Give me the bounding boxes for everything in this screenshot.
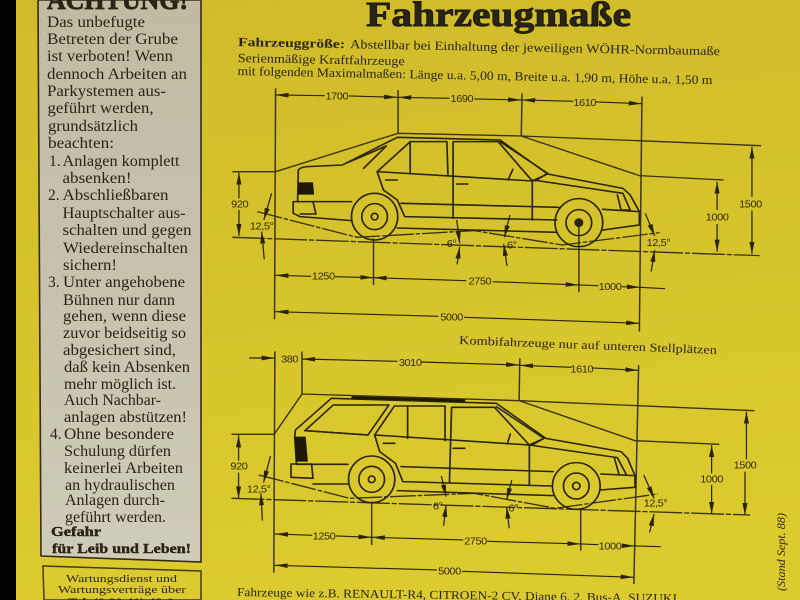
- estate roof rail: [352, 397, 465, 401]
- warning text block: zuvor beidseitig so: [63, 325, 186, 342]
- warning text block: abgesichert sind,: [63, 342, 176, 359]
- estate dimension labels: [230, 354, 757, 577]
- warning text block: Betreten der Grube: [47, 31, 178, 48]
- estate dimension labels: 1000: [599, 541, 622, 552]
- estate dimension labels: 1000: [700, 474, 724, 485]
- sedan dimension labels: 6°: [507, 240, 517, 251]
- warning text block: absenken!: [62, 170, 132, 187]
- estate dimension labels: 2750: [464, 536, 487, 547]
- sedan dimension labels: 12,5°: [647, 237, 670, 249]
- sedan dimension labels: 1690: [451, 93, 474, 105]
- diagram: estate dimensions: [230, 352, 757, 584]
- sedan dimension labels: 2750: [469, 276, 492, 287]
- estate tail light: [295, 437, 308, 462]
- warning text block: [47, 14, 192, 526]
- vehicle size description: Serienmäßige Kraftfahrzeuge: [238, 51, 405, 68]
- sedan car outline: [293, 137, 639, 247]
- sedan dimension labels: 1610: [573, 97, 597, 109]
- warning text block: Anlagen durch-: [65, 492, 165, 509]
- estate dimension labels: 6°: [508, 503, 518, 514]
- vehicle size description: mit folgenden Maximalmaßen: Länge u.a. 5,00 m, Breite u.a. 1,90 m, Höhe u.a. 1,50 m: [237, 64, 713, 87]
- estate dimension labels: 380: [281, 354, 299, 366]
- warning text block: 1.: [49, 153, 61, 170]
- sedan dimension labels: 920: [231, 199, 249, 210]
- estate dimension labels: 1610: [570, 364, 594, 375]
- warning text block: daß kein Absenken: [64, 359, 190, 376]
- estate vehicles note: Kombifahrzeuge nur auf unteren Stellplätzen: [459, 333, 717, 357]
- warning text block: an hydraulischen: [65, 477, 175, 494]
- warning text block: Schulung dürfen: [64, 443, 171, 460]
- warning text block: 3.: [48, 274, 60, 291]
- sedan dimension labels: 1250: [312, 271, 335, 282]
- warning text block: keinerlei Arbeiten: [64, 460, 183, 477]
- estate dimension labels: 1500: [734, 460, 757, 472]
- warning text block: Bühnen nur dann: [63, 292, 175, 309]
- warning text block: Das unbefugte: [47, 14, 145, 31]
- warning text block: ist verboten! Wenn: [47, 48, 173, 65]
- estate dimension labels: 3010: [399, 357, 422, 369]
- warning text block: 2.: [48, 187, 60, 204]
- danger notice: [51, 524, 191, 556]
- warning text block: Unter angehobene: [63, 274, 185, 291]
- estate dimension labels: 6°: [433, 501, 443, 512]
- vehicle size description: [237, 35, 721, 87]
- warning text block: sichern!: [63, 257, 117, 274]
- estate dimension labels: 12,5°: [644, 498, 668, 510]
- estate car outline: [291, 398, 635, 509]
- warning text block: geführt werden.: [65, 509, 166, 526]
- sedan dimension labels: 1500: [739, 199, 762, 210]
- warning text block: Auch Nachbar-: [64, 392, 161, 409]
- sedan dimension labels: 6°: [447, 238, 457, 250]
- sedan dimension labels: 12,5°: [250, 221, 274, 232]
- service contact box: [43, 566, 201, 600]
- sedan dimension labels: 5000: [440, 312, 464, 323]
- estate extension and clearance lines: [232, 352, 755, 584]
- diagram: sedan dimensions: [231, 88, 762, 332]
- sedan dimension labels: [231, 91, 762, 323]
- sedan extension and clearance lines: [232, 88, 761, 332]
- estate dimension labels: 5000: [438, 566, 461, 577]
- warning text block: geführt werden,: [48, 100, 154, 117]
- estate dimension labels: 1250: [313, 531, 336, 542]
- warning text block: gehen, wenn diese: [63, 308, 186, 325]
- sedan tail light: [298, 182, 314, 195]
- warning text block: schalten und gegen: [62, 222, 192, 239]
- vehicle size description: Abstellbar bei Einhaltung der jeweiligen WÖHR-Normbaumaße: [350, 37, 721, 58]
- danger notice: Gefahr: [51, 524, 101, 539]
- warning text block: Parkystemen aus-: [47, 83, 166, 100]
- warning text block: dennoch Arbeiten an: [47, 66, 187, 83]
- warning text block: anlagen abstützen!: [64, 409, 187, 426]
- vehicle size description: Fahrzeuggröße:: [238, 35, 345, 51]
- warning text block: Hauptschalter aus-: [62, 205, 186, 222]
- sedan dimension labels: 1000: [706, 212, 729, 223]
- service contact box: Wartungsdienst und: [66, 573, 178, 585]
- warning text block: 4.: [50, 426, 62, 443]
- sedan dimension lines and arrows: [239, 95, 752, 323]
- service contact box: Wartungsverträge über: [58, 584, 186, 596]
- danger notice: für Leib und Leben!: [52, 541, 191, 556]
- warning text block: grundsätzlich: [48, 118, 138, 135]
- warning text block: Wiedereinschalten: [63, 240, 188, 257]
- sedan dimension labels: 1700: [325, 91, 349, 102]
- estate dimension labels: 920: [230, 461, 248, 473]
- warning text block: Anlagen komplett: [62, 153, 180, 170]
- warning text block: mehr möglich ist.: [64, 376, 176, 393]
- estate dimension labels: 12,5°: [247, 484, 271, 495]
- revision date note: (Stand Sept. 88): [776, 513, 788, 591]
- estate dimension lines and arrows: [239, 358, 746, 577]
- sedan dimension labels: 1000: [599, 281, 622, 293]
- warning text block: beachten:: [48, 135, 114, 152]
- panel: safety warning: [38, 0, 201, 562]
- warning text block: Ohne besondere: [64, 426, 174, 443]
- warning text block: Abschließbaren: [62, 187, 169, 204]
